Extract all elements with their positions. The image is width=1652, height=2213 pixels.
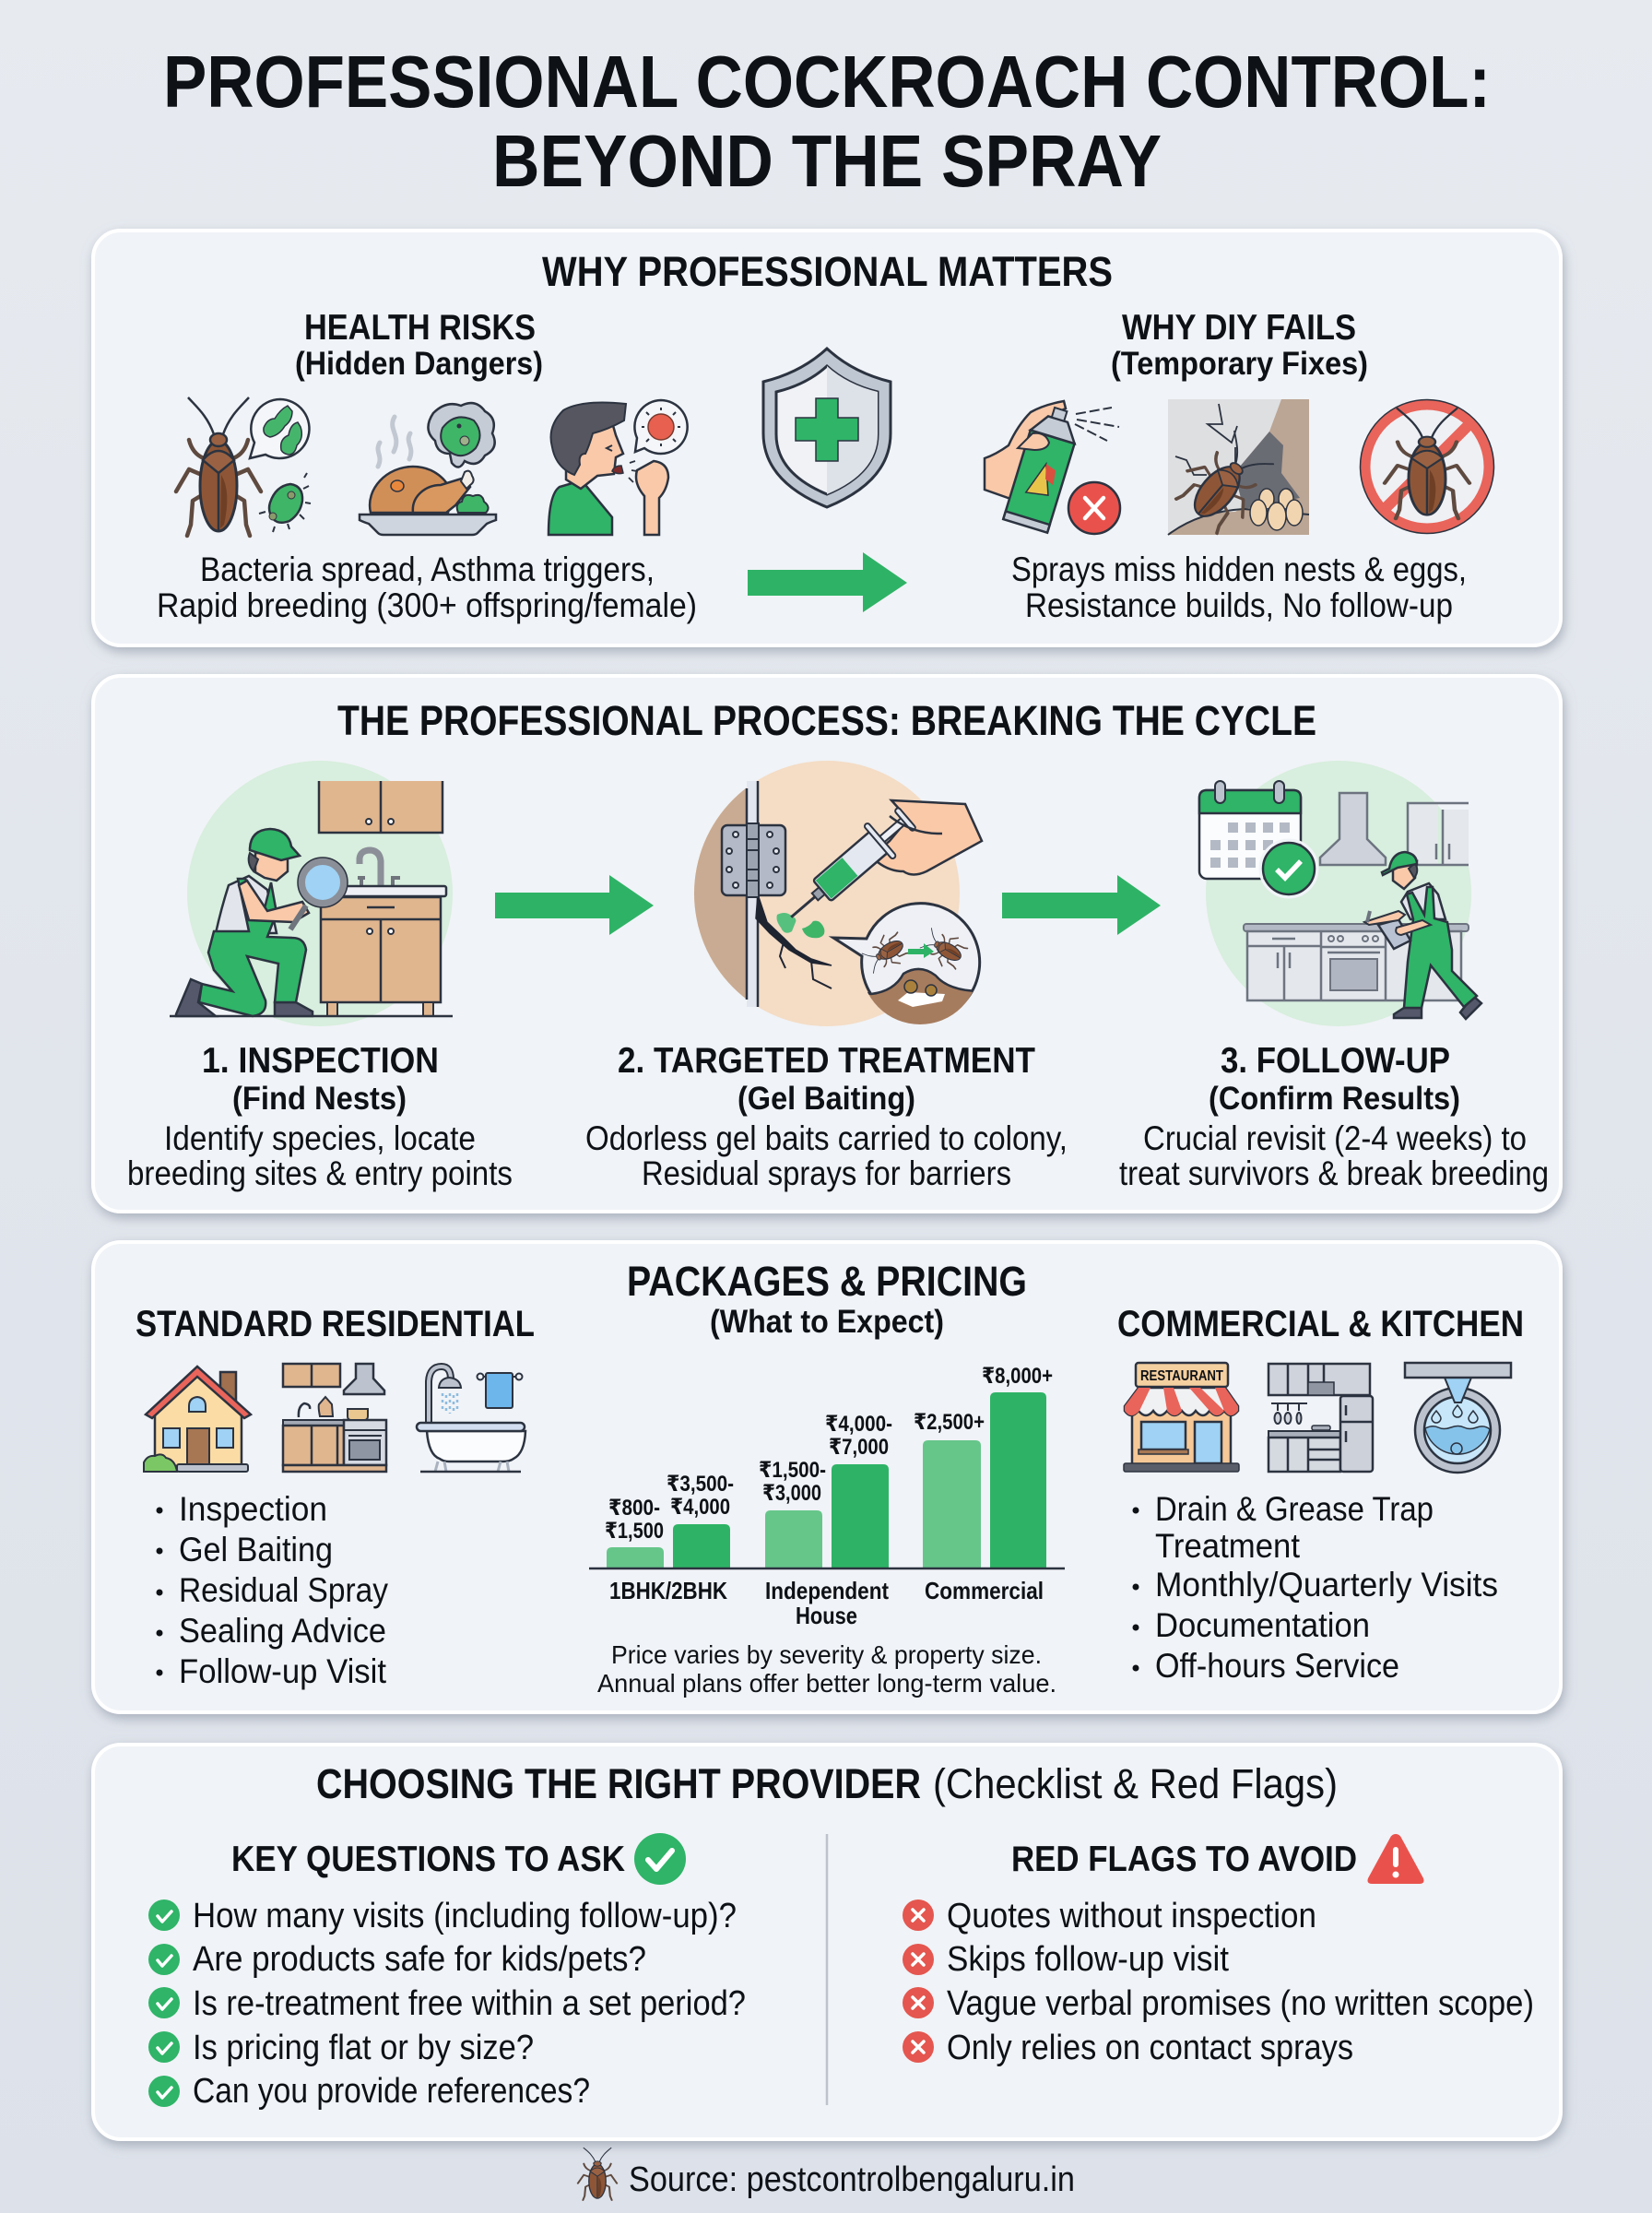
text: pricing note: [597, 1640, 1056, 1698]
heading: packages and pricing: PACKAGES & PRICING: [627, 1258, 1027, 1305]
icon: residential kitchen: [283, 1364, 386, 1472]
heading: why diy fails: (Temporary Fixes): [1111, 346, 1368, 382]
checklist: red flags: Only relies on contact sprays: [947, 2029, 1353, 2067]
heading: key questions to ask: KEY QUESTIONS TO ASK: [231, 1840, 625, 1879]
checklist: key questions: Are products safe for kids/pets?: [193, 1940, 646, 1979]
arrow: treatment to follow-up: [1002, 875, 1161, 935]
list: standard residential inclusions: [157, 1490, 388, 1690]
bar chart: price ranges: ₹1,500: [605, 1519, 664, 1544]
bar chart: price ranges: ₹3,000: [762, 1481, 821, 1506]
icon: cockroach in wall crack with eggs: [1168, 399, 1309, 539]
icon: spray can with cross: [985, 401, 1120, 534]
list: standard residential inclusions: Sealing Advice: [179, 1612, 386, 1650]
icon: commercial kitchen: [1268, 1364, 1373, 1472]
text: pricing note: Annual plans offer better long-term value.: [597, 1669, 1056, 1698]
checklist: red flags: Quotes without inspection: [947, 1897, 1316, 1935]
icon: gel bait application at door hinge: [691, 756, 986, 1033]
text: step 2 targeted treatment: Odorless gel baits carried to colony,: [585, 1119, 1068, 1157]
title: BEYOND THE SPRAY: [492, 120, 1162, 202]
list: commercial inclusions: Monthly/Quarterly Visits: [1155, 1566, 1498, 1604]
icon: restaurant: RESTAURANT: [1140, 1368, 1223, 1384]
text: step 3 follow-up: (Confirm Results): [1209, 1081, 1460, 1117]
text: why diy fails: Sprays miss hidden nests & eggs,: [1011, 550, 1467, 588]
list: commercial inclusions: Off-hours Service: [1155, 1647, 1399, 1685]
icon: cockroach with bacteria: [176, 397, 311, 536]
panel: the professional process: [93, 676, 1561, 1212]
list: standard residential inclusions: Gel Baiting: [179, 1531, 333, 1568]
text: step 1 inspection: [127, 1041, 513, 1192]
text: health risks: [157, 550, 697, 624]
bar chart: price ranges: 1BHK/2BHK: [609, 1577, 727, 1604]
heading: choosing the right provider: [316, 1760, 1338, 1807]
text: health risks: Rapid breeding (300+ offspring/female): [157, 586, 697, 624]
icon: shield with cross: [763, 349, 891, 507]
list: commercial inclusions: [1132, 1490, 1498, 1685]
bar chart: price ranges: ₹1,500-: [759, 1458, 826, 1483]
text: step 1 inspection: breeding sites & entry points: [127, 1154, 513, 1192]
checklist: red flags: Vague verbal promises (no written scope): [947, 1984, 1534, 2023]
bar chart: price ranges: [589, 1364, 1065, 1629]
text: step 1 inspection: Identify species, locate: [164, 1119, 476, 1157]
icon: house: [144, 1367, 251, 1472]
bar chart: price ranges: ₹2,500+: [914, 1410, 985, 1435]
panel: why professional matters: [93, 231, 1561, 645]
heading: standard residential: STANDARD RESIDENTIAL: [136, 1304, 535, 1344]
text: why diy fails: Resistance builds, No follow-up: [1025, 586, 1453, 624]
title: PROFESSIONAL COCKROACH CONTROL:: [163, 41, 1491, 123]
arrow: health risks to diy fails: [748, 552, 907, 612]
list: commercial inclusions: Drain & Grease Trap: [1155, 1490, 1434, 1528]
bar chart: price ranges: ₹7,000: [829, 1435, 889, 1460]
panel: choosing the right provider: [93, 1745, 1561, 2139]
bar chart: price ranges: ₹800-: [608, 1496, 660, 1521]
text: step 1 inspection: (Find Nests): [232, 1081, 407, 1117]
title: [163, 41, 1491, 202]
bar chart: price ranges: Commercial: [925, 1577, 1044, 1604]
icon: crossed out cockroach: [1361, 400, 1493, 533]
checklist: key questions: [148, 1897, 746, 2111]
heading: choosing the right provider: CHOOSING THE RIGHT PROVIDER: [316, 1760, 921, 1807]
checklist: red flags: [903, 1897, 1534, 2067]
text: step 3 follow-up: treat survivors & break breeding: [1119, 1154, 1549, 1192]
checklist: key questions: Is re-treatment free within a set period?: [193, 1984, 746, 2023]
checklist: red flags: Skips follow-up visit: [947, 1940, 1229, 1979]
icon: bathtub with shower: [417, 1367, 525, 1472]
bar chart: price ranges: ₹4,000: [670, 1495, 730, 1520]
list: commercial inclusions: Documentation: [1155, 1606, 1370, 1644]
text: step 2 targeted treatment: (Gel Baiting): [738, 1081, 915, 1117]
heading: the professional process: THE PROFESSIONAL PROCESS: BREAKING THE CYCLE: [337, 697, 1316, 744]
arrow: inspection to treatment: [495, 875, 654, 935]
icon: cockroach: [578, 2148, 617, 2200]
bar chart: price ranges: Independent: [765, 1577, 889, 1604]
bar chart: price ranges: ₹8,000+: [982, 1364, 1053, 1389]
text: why diy fails: [1011, 550, 1467, 624]
text: step 1 inspection: 1. INSPECTION: [202, 1041, 439, 1081]
text: step 3 follow-up: Crucial revisit (2-4 weeks) to: [1143, 1119, 1527, 1157]
heading: choosing the right provider: (Checklist & Red Flags): [933, 1760, 1338, 1807]
heading: packages and pricing: [627, 1258, 1027, 1340]
checklist: key questions: Is pricing flat or by size?: [193, 2029, 534, 2067]
heading: health risks: [295, 308, 543, 382]
icon: restaurant: [1124, 1363, 1239, 1472]
list: standard residential inclusions: Follow-up Visit: [179, 1652, 387, 1690]
text: step 2 targeted treatment: 2. TARGETED TREATMENT: [618, 1041, 1035, 1081]
heading: packages and pricing: (What to Expect): [710, 1304, 944, 1340]
heading: health risks: HEALTH RISKS: [304, 308, 536, 348]
list: standard residential inclusions: Inspection: [179, 1490, 327, 1528]
icon: coughing person with virus: [549, 400, 688, 535]
text: step 2 targeted treatment: Residual sprays for barriers: [642, 1154, 1011, 1192]
icon: contaminated food: [360, 403, 496, 535]
checklist: key questions: Can you provide references?: [193, 2072, 590, 2111]
bar chart: price ranges: ₹4,000-: [825, 1412, 892, 1437]
checklist: key questions: How many visits (including follow-up)?: [193, 1897, 737, 1935]
heading: why professional matters: WHY PROFESSIONAL MATTERS: [542, 248, 1113, 295]
heading: commercial and kitchen: COMMERCIAL & KITCHEN: [1117, 1304, 1524, 1344]
heading: red flags to avoid: RED FLAGS TO AVOID: [1011, 1840, 1357, 1879]
footer: source: [578, 2148, 1075, 2200]
heading: health risks: (Hidden Dangers): [295, 346, 543, 382]
list: commercial inclusions: Treatment: [1155, 1527, 1301, 1565]
text: step 3 follow-up: [1119, 1041, 1549, 1192]
text: step 2 targeted treatment: [585, 1041, 1068, 1192]
heading: why diy fails: [1111, 308, 1368, 382]
text: pricing note: Price varies by severity & property size.: [611, 1640, 1042, 1669]
panel: packages and pricing: [93, 1242, 1561, 1712]
icon: technician inspecting kitchen cabinet: [170, 761, 453, 1026]
bar chart: price ranges: House: [796, 1602, 857, 1629]
list: standard residential inclusions: Residual Spray: [179, 1571, 388, 1609]
icon: floor drain and grease trap: [1405, 1363, 1511, 1473]
text: step 3 follow-up: 3. FOLLOW-UP: [1221, 1041, 1450, 1081]
text: health risks: Bacteria spread, Asthma triggers,: [200, 550, 655, 588]
bar chart: price ranges: ₹3,500-: [667, 1472, 734, 1497]
icon: follow-up visit in kitchen with calendar: [1199, 761, 1481, 1026]
footer: source: Source: pestcontrolbengaluru.in: [629, 2160, 1075, 2199]
heading: why diy fails: WHY DIY FAILS: [1122, 308, 1356, 348]
